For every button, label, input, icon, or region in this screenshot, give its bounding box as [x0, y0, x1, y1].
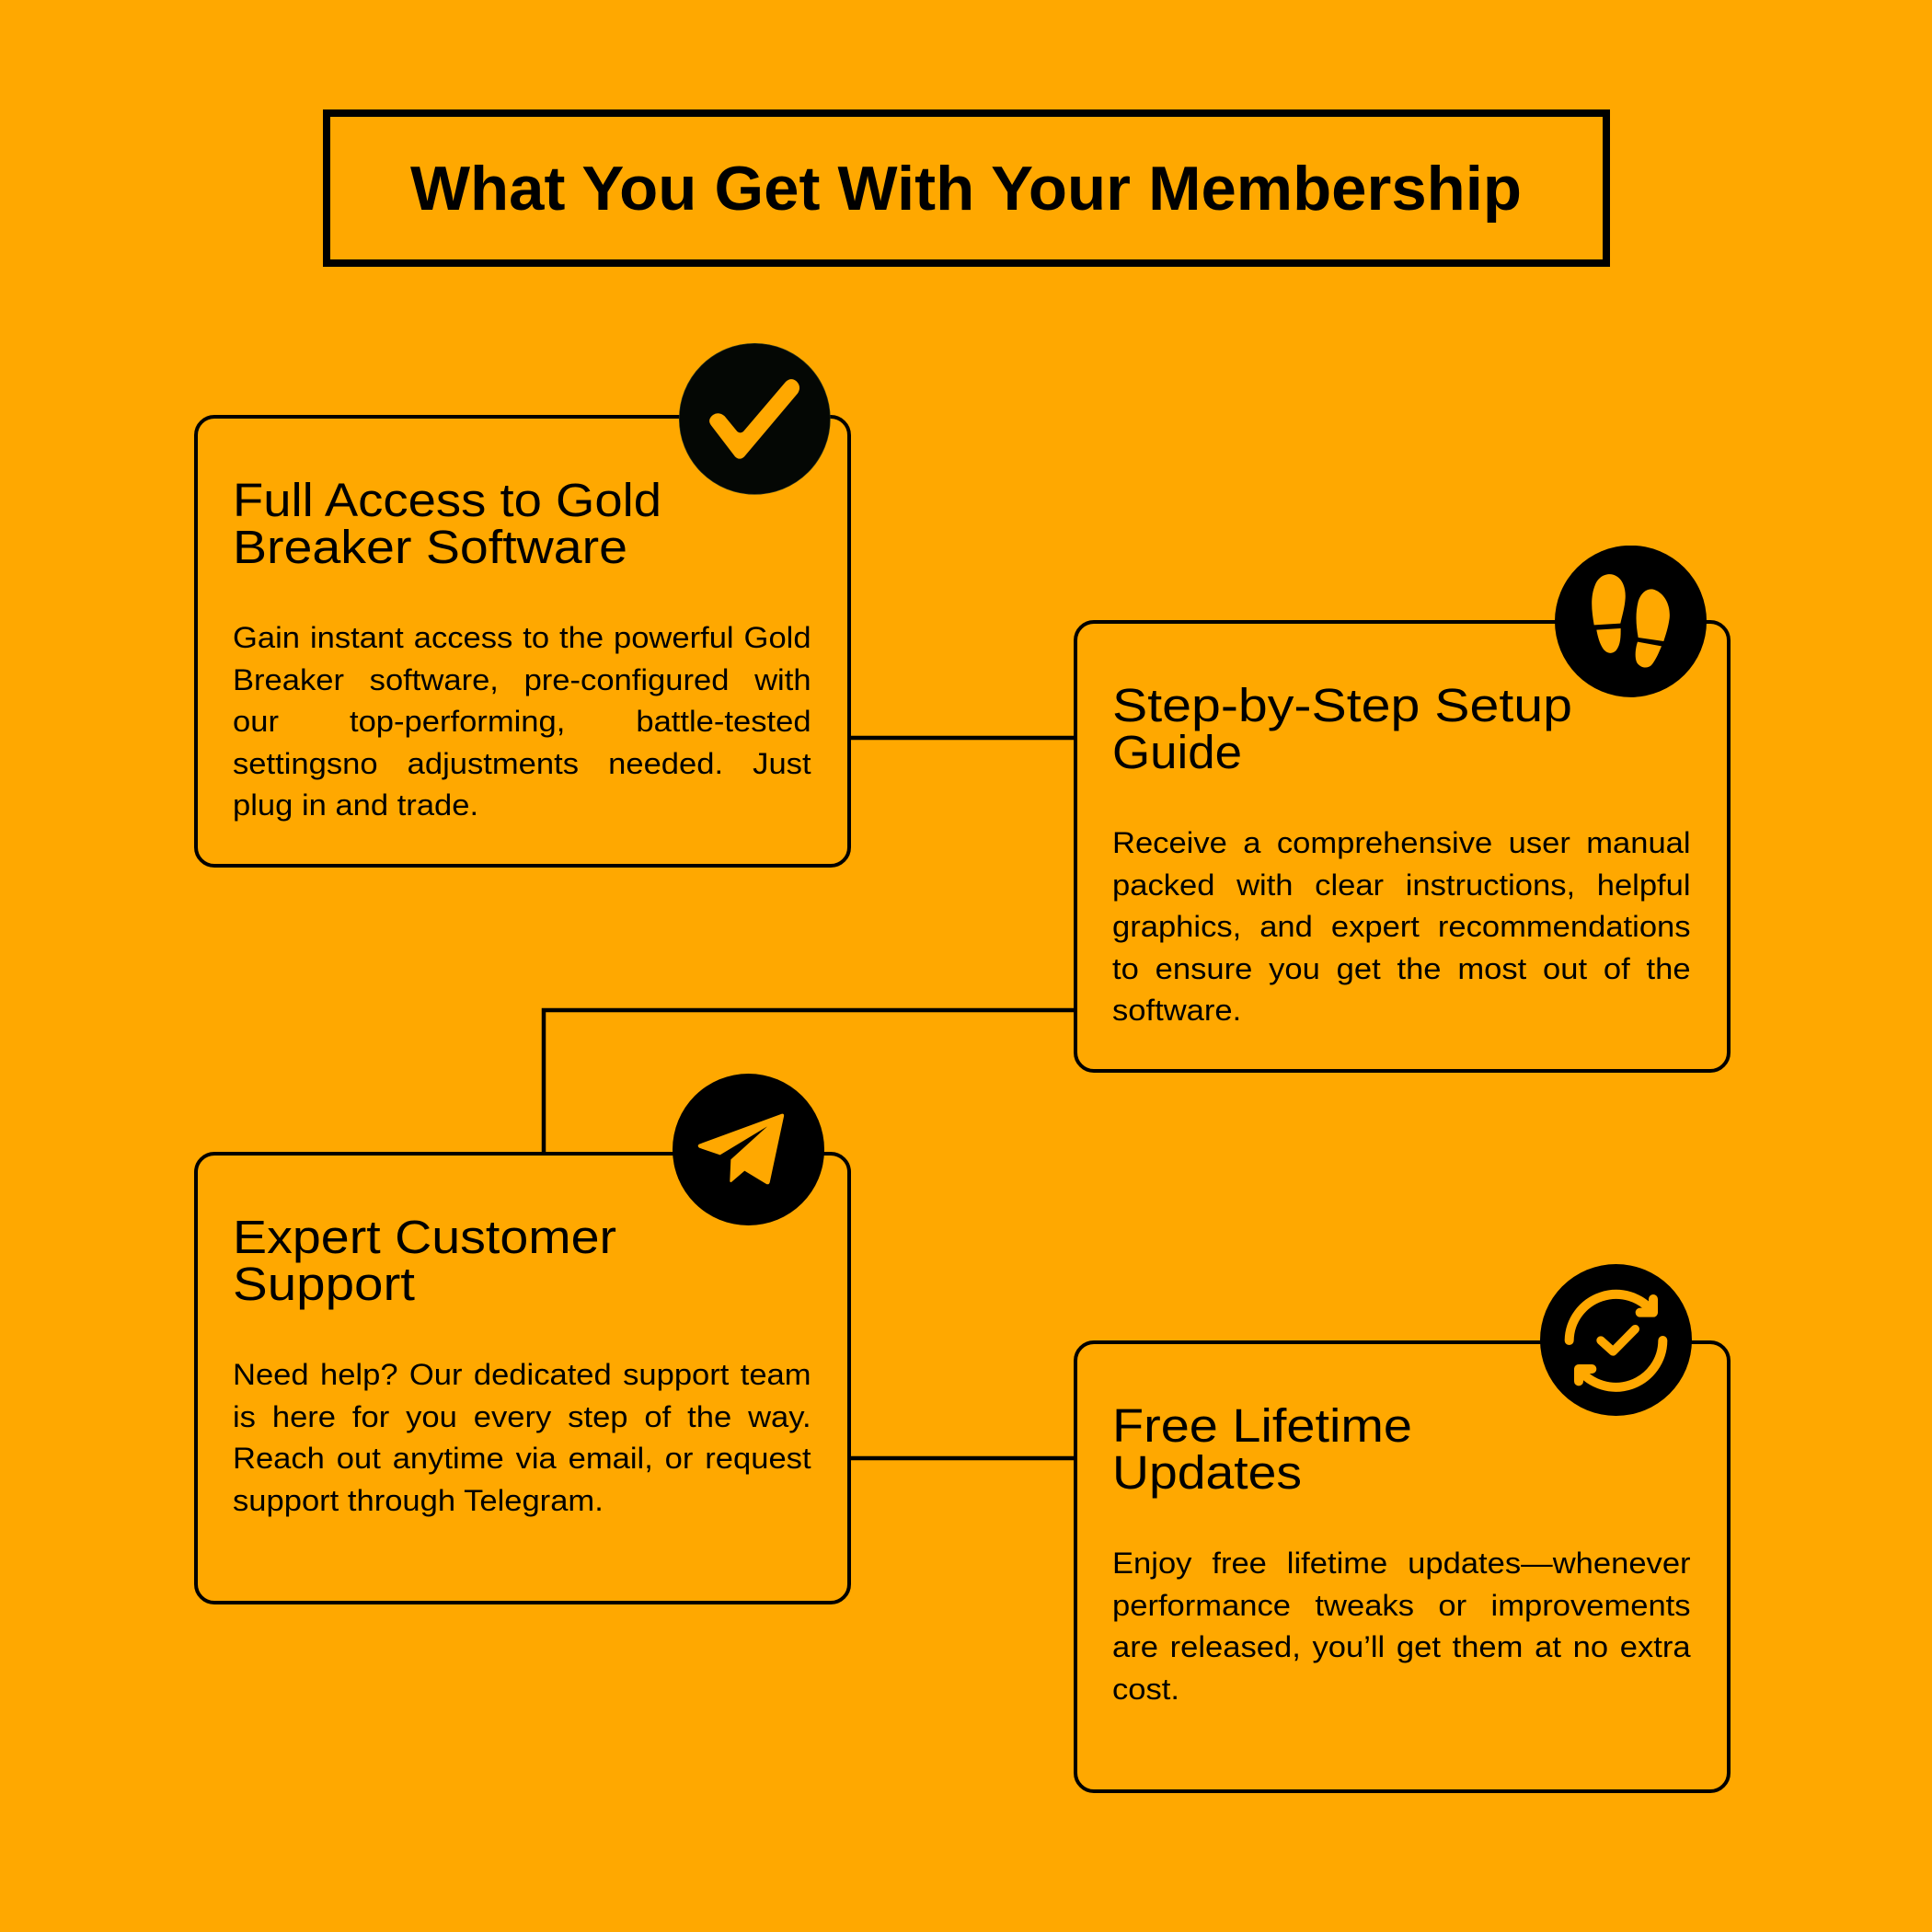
text: lifetime updates description: performance tweaks or improvements — [1112, 1588, 1691, 1621]
heading: setup guide: Step-by-Step Setup — [1112, 679, 1572, 731]
text: setup guide description: graphics, and expert recommendations — [1112, 910, 1691, 943]
icon: footprints — [1555, 546, 1707, 697]
heading: lifetime updates: Updates — [1112, 1446, 1302, 1499]
panel: customer support — [194, 1074, 851, 1604]
icon: paper plane — [673, 1074, 824, 1225]
heading: full access: Breaker Software — [233, 521, 627, 573]
heading: full access — [233, 474, 661, 573]
text: full access description: Breaker software, pre-configured with — [233, 662, 811, 696]
text: setup guide description — [1112, 826, 1691, 1027]
title: What You Get With Your Membership — [410, 154, 1522, 224]
heading: customer support: Support — [233, 1258, 415, 1310]
panel: setup guide — [1074, 546, 1731, 1073]
text: setup guide description: software. — [1112, 994, 1241, 1027]
text: setup guide description: Receive a comprehensive user manual — [1112, 826, 1691, 859]
text: setup guide description: packed with clear instructions, helpful — [1112, 868, 1691, 902]
text: customer support description: Need help? Our dedicated support team — [233, 1358, 811, 1391]
heading: full access: Full Access to Gold — [233, 474, 661, 526]
icon: sync check — [1540, 1264, 1692, 1416]
text: lifetime updates description: are released, you’ll get them at no extra — [1112, 1630, 1691, 1663]
heading: customer support: Expert Customer — [233, 1211, 616, 1263]
heading: setup guide: Guide — [1112, 726, 1242, 778]
text: full access description: settingsno adjustments needed. Just — [233, 747, 811, 780]
text: lifetime updates description: cost. — [1112, 1673, 1179, 1706]
text: customer support description — [233, 1358, 811, 1516]
text: customer support description: Reach out anytime via email, or request — [233, 1442, 811, 1475]
heading: setup guide — [1112, 679, 1572, 778]
icon: check mark — [679, 343, 831, 495]
text: full access description: Gain instant access to the powerful Gold — [233, 621, 811, 654]
text: full access description: plug in and trade. — [233, 788, 478, 822]
text: customer support description: is here for you every step of the way. — [233, 1400, 811, 1433]
heading: lifetime updates: Free Lifetime — [1112, 1399, 1412, 1452]
heading: customer support — [233, 1211, 616, 1310]
text: customer support description: support through Telegram. — [233, 1483, 604, 1516]
text: lifetime updates description — [1112, 1547, 1691, 1706]
title — [322, 109, 1610, 267]
panel: full access — [194, 343, 851, 868]
panel: lifetime updates — [1074, 1264, 1731, 1793]
text: full access description — [233, 621, 811, 822]
text: full access description: our top-performing, battle-tested — [233, 705, 811, 738]
heading: lifetime updates — [1112, 1399, 1412, 1499]
text: setup guide description: to ensure you get the most out of the — [1112, 951, 1691, 984]
text: lifetime updates description: Enjoy free lifetime updates—whenever — [1112, 1547, 1691, 1580]
